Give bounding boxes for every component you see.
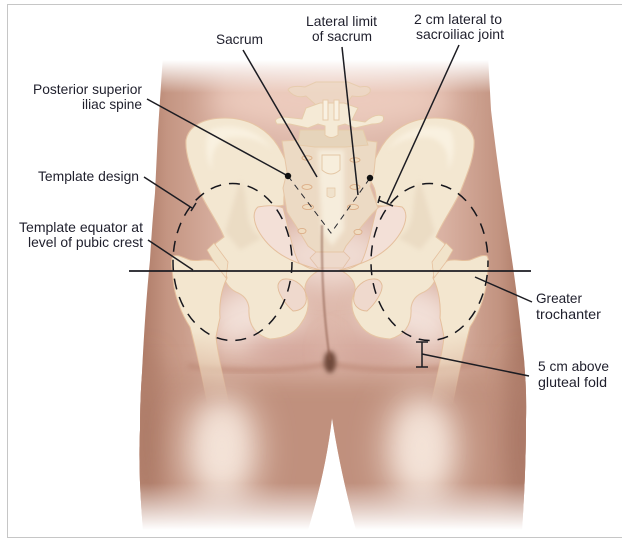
label: template equator: Template equator at — [19, 219, 143, 235]
label: 2 cm lateral to sacroiliac joint: 2 cm lateral to — [414, 11, 502, 27]
label: sacrum: Sacrum — [216, 31, 263, 47]
label: lateral limit of sacrum — [306, 13, 377, 44]
label: greater trochanter — [536, 290, 601, 322]
coccyx — [310, 248, 350, 268]
label: greater trochanter: Greater — [536, 290, 582, 306]
label: 5 cm above gluteal fold: gluteal fold — [538, 374, 607, 390]
label: 2 cm lateral to sacroiliac joint — [414, 11, 504, 42]
leader: template equator — [148, 240, 193, 270]
label: posterior superior iliac spine — [33, 81, 142, 112]
dashed template circle: right — [371, 184, 488, 340]
label: posterior superior iliac spine: iliac spine — [82, 96, 142, 112]
pelvis skeleton — [171, 82, 489, 408]
label: posterior superior iliac spine: Posterior superior — [33, 81, 142, 97]
gluteal folds — [188, 364, 476, 371]
top and bottom fades — [120, 55, 550, 533]
label: 5 cm above gluteal fold: 5 cm above — [538, 358, 609, 374]
pelvis halo — [210, 285, 300, 355]
label: template equator — [19, 219, 143, 250]
dashed sacral triangle — [288, 176, 370, 233]
sacrum — [282, 140, 378, 252]
right iliac spine dot — [367, 175, 373, 181]
thigh base — [139, 363, 526, 522]
label: lateral limit of sacrum: Lateral limit — [306, 13, 377, 29]
leader: lateral limit of sacrum — [342, 47, 358, 195]
leader: 2 cm lateral — [378, 45, 459, 206]
label: template equator: level of pubic crest — [28, 234, 143, 250]
dashed template circle: left — [173, 184, 292, 340]
body — [139, 62, 526, 527]
lumbar vertebrae — [276, 82, 384, 147]
leader: posterior superior iliac spine — [147, 99, 291, 179]
leader: 5 cm above gluteal fold — [416, 342, 529, 376]
label: 5 cm above gluteal fold — [538, 358, 609, 390]
label: 2 cm lateral to sacroiliac joint: sacroiliac joint — [416, 26, 504, 42]
leader: sacrum — [243, 50, 317, 177]
leader: template design — [144, 177, 196, 211]
label: lateral limit of sacrum: of sacrum — [312, 28, 372, 44]
sacral foramina — [298, 156, 362, 235]
upper back light zone — [210, 70, 450, 130]
gluteal cleft — [322, 225, 330, 360]
label: greater trochanter: trochanter — [536, 306, 601, 322]
equator line — [129, 270, 531, 272]
buttock tone — [240, 336, 330, 368]
label: template design: Template design — [38, 168, 139, 184]
leader: greater trochanter — [475, 277, 532, 302]
cleft base — [324, 351, 336, 373]
